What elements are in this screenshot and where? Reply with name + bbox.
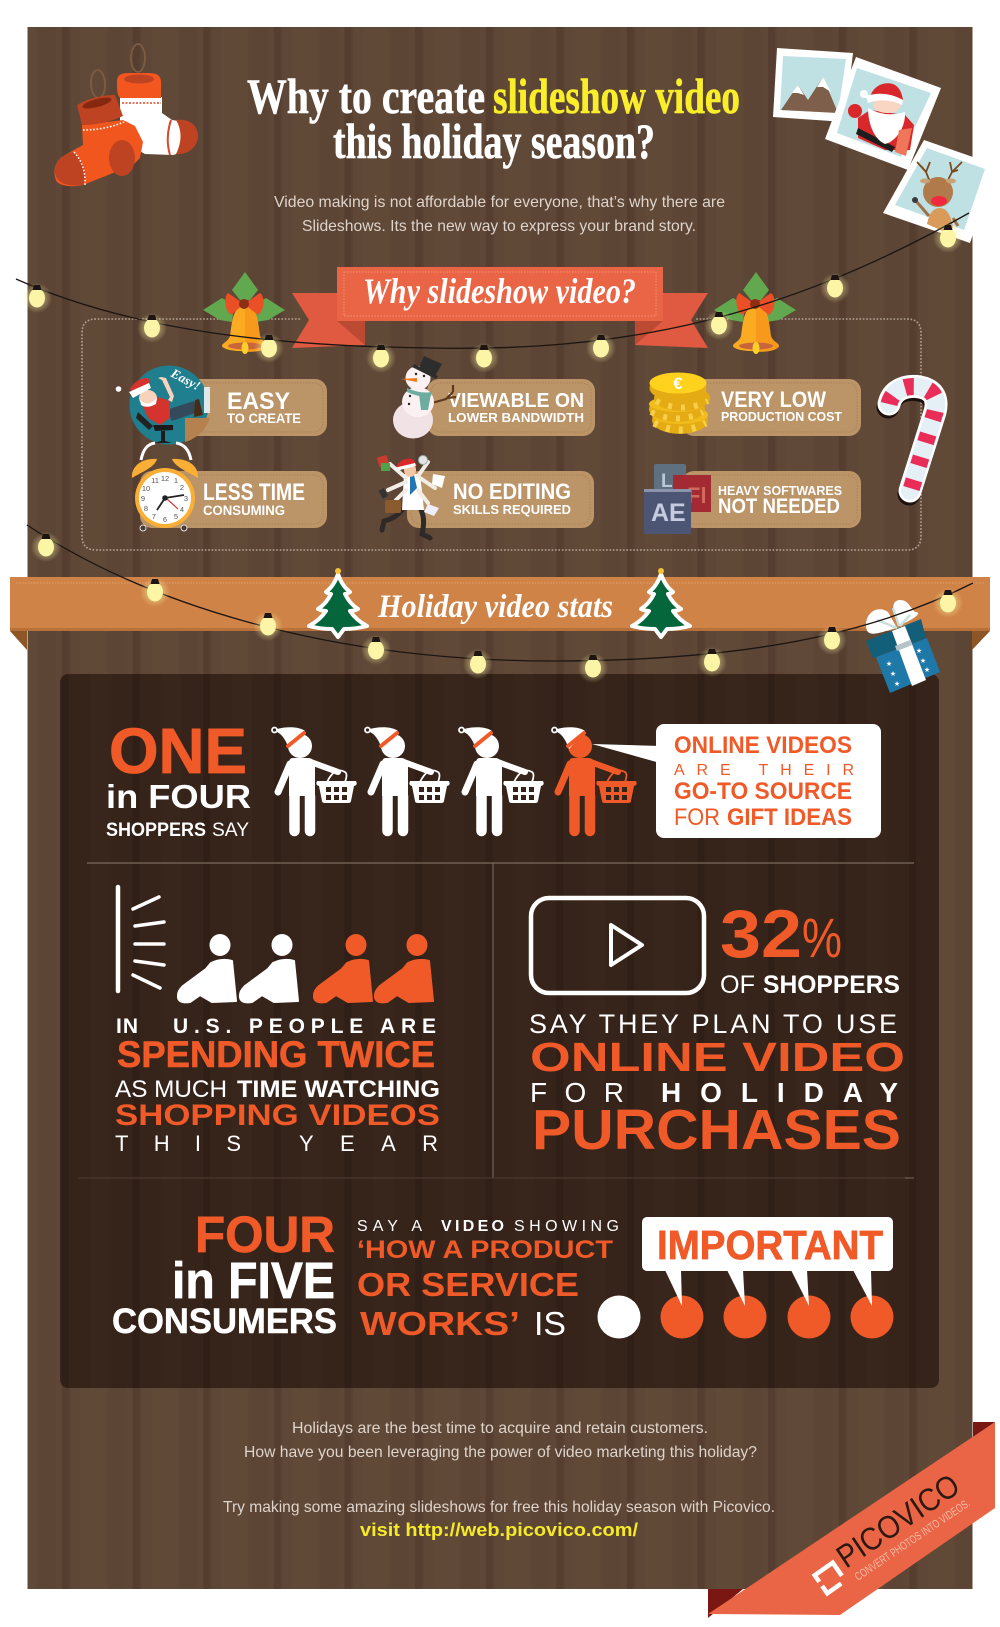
callout: online videos: [592, 724, 881, 838]
icon: snowman: [393, 356, 456, 438]
footer text: Holidays are the best time to acquire and retain customers.: [292, 1420, 708, 1437]
icon: alarm clock: 12: [161, 474, 169, 483]
footer text: How have you been leveraging the power of video marketing this holiday?: [244, 1444, 757, 1461]
pill: viewable on lower bandwidth: VIEWABLE ON: [448, 390, 584, 412]
icon: alarm clock: 9: [141, 494, 145, 503]
icon: gift box: ★: [894, 680, 900, 688]
stat: four in five consumers: in FIVE: [172, 1252, 335, 1309]
pictogram: important speech bubble and dots: IMPORTANT: [657, 1222, 883, 1268]
stat: one in four shoppers: in FOUR: [106, 778, 251, 815]
dotted benefits frame: [82, 319, 921, 550]
pill: easy to create: [185, 379, 327, 436]
icon: alarm clock: 8: [144, 504, 148, 513]
pill: less time consuming: LESS TIME: [203, 479, 305, 506]
stat: one in four shoppers: SHOPPERS: [106, 820, 206, 841]
callout: online videos: ARE THEIR: [674, 762, 854, 779]
icon: candy cane: [888, 386, 936, 494]
icon: christmas socks: [54, 44, 198, 186]
callout: online videos: FOR: [674, 804, 720, 831]
text: people spending twice: YEAR: [299, 1131, 438, 1156]
text: how a product or service works: WORKS’: [360, 1305, 520, 1342]
stat: four in five consumers: CONSUMERS: [112, 1302, 337, 1341]
pill: very low production cost: [682, 379, 861, 436]
stat: 32 percent of shoppers: FOR: [530, 1077, 624, 1108]
pill: heavy softwares not needed: NOT NEEDED: [718, 495, 840, 518]
icon: software boxes: L: [661, 471, 673, 492]
text: people spending twice: [115, 1015, 440, 1156]
callout: online videos: GO-TO SOURCE: [674, 778, 852, 805]
icon: gift box: ★: [890, 670, 896, 678]
icon: alarm clock: 1: [174, 476, 178, 485]
pictogram: four shoppers: [272, 727, 637, 831]
pill: viewable on lower bandwidth: [427, 379, 595, 436]
footer text: [223, 1420, 775, 1540]
pill: less time consuming: CONSUMING: [203, 502, 285, 518]
stat: 32 percent of shoppers: SHOPPERS: [763, 971, 900, 999]
string lights bottom: [27, 525, 973, 683]
string lights top: [16, 213, 969, 373]
icon: alarm clock: 3: [184, 494, 188, 503]
icon: tree right: [632, 568, 690, 637]
pill: very low production cost: PRODUCTION COST: [721, 409, 842, 424]
subtitle text: Slideshows. Its the new way to express your brand story.: [302, 218, 696, 235]
icon: photo with reindeer: [883, 140, 996, 243]
icon: tree left: [309, 568, 367, 637]
pill: no editing skills required: [407, 471, 594, 528]
icon: alarm clock: 2: [180, 483, 184, 492]
pill: no editing skills required: SKILLS REQUIRED: [453, 502, 571, 517]
icon: gift box: ★: [920, 657, 926, 665]
icon: stack of coins: [649, 372, 710, 434]
icon: software boxes: [644, 464, 711, 534]
title: slideshow video: [493, 68, 740, 124]
icon: santa at desk: Easy!: [168, 365, 203, 393]
pictogram: people watching screen: [118, 887, 433, 1002]
text: how a product or service works: SHOWING: [514, 1218, 619, 1235]
text: how a product or service works: VIDEO: [441, 1218, 504, 1235]
stat: one in four shoppers: [106, 715, 251, 841]
icon: bell right: [714, 272, 796, 354]
stat: 32 percent of shoppers: ONLINE VIDEO: [530, 1034, 905, 1080]
text: people spending twice: U.S. PEOPLE ARE: [173, 1015, 436, 1038]
icon: gift box: ★: [916, 647, 922, 655]
stat: four in five consumers: [112, 1206, 337, 1341]
stat: four in five consumers: FOUR: [195, 1206, 335, 1263]
pill: easy to create: TO CREATE: [227, 410, 301, 426]
icon: software boxes: Fl: [687, 483, 707, 508]
picovico wordmark: PICOVICO: [830, 1467, 966, 1575]
icon: video play button: [531, 898, 704, 993]
pictogram: important speech bubble and dots: [598, 1217, 894, 1338]
icon: multitasking man: [377, 455, 445, 538]
text: how a product or service works: ‘HOW A PRODUCT: [357, 1236, 613, 1264]
stat: one in four shoppers: ONE: [109, 715, 247, 787]
footer text: visit http://web.picovico.com/: [360, 1520, 638, 1540]
pill: viewable on lower bandwidth: LOWER BANDWIDTH: [448, 410, 584, 425]
pill: easy to create: EASY: [227, 388, 290, 415]
stat: 32 percent of shoppers: SAY THEY PLAN TO USE: [529, 1009, 897, 1039]
subtitle text: Video making is not affordable for everyone, that’s why there are: [274, 194, 725, 211]
icon: alarm clock: [132, 443, 198, 531]
callout: online videos: GIFT IDEAS: [727, 804, 852, 831]
text: how a product or service works: IS: [534, 1305, 566, 1342]
icon: stack of coins: €: [673, 374, 683, 393]
corner ribbon: picovico: [708, 1422, 995, 1618]
pill: heavy softwares not needed: [682, 471, 861, 528]
title: this holiday season?: [333, 113, 655, 169]
stat: 32 percent of shoppers: OF: [720, 971, 755, 999]
ribbon: why slideshow video: [292, 267, 708, 348]
icon: alarm clock: 5: [174, 512, 178, 521]
dark stats panel: [60, 674, 939, 1388]
pill: heavy softwares not needed: HEAVY SOFTWARES: [718, 483, 842, 498]
pill: no editing skills required: NO EDITING: [453, 479, 571, 504]
text: people spending twice: TIME WATCHING: [237, 1076, 440, 1103]
pill: very low production cost: VERY LOW: [721, 387, 826, 412]
icon: alarm clock: 4: [180, 505, 184, 514]
callout: online videos: ONLINE VIDEOS: [674, 732, 852, 759]
stat: 32 percent of shoppers: PURCHASES: [532, 1098, 901, 1162]
title: [247, 68, 740, 169]
ribbon heading: Why slideshow video?: [363, 271, 636, 311]
icon: alarm clock: 11: [151, 476, 159, 485]
stat: one in four shoppers: SAY: [212, 820, 249, 841]
icon: picovico logo: [815, 1563, 845, 1593]
text: people spending twice: SHOPPING VIDEOS: [115, 1099, 440, 1132]
text: people spending twice: THIS: [115, 1131, 241, 1156]
text: how a product or service works: [357, 1218, 619, 1342]
icon: gift box: ★: [886, 660, 892, 668]
pill: less time consuming: [140, 471, 327, 528]
icon: alarm clock: 7: [152, 512, 156, 521]
text: people spending twice: SPENDING TWICE: [117, 1034, 435, 1075]
text: how a product or service works: OR SERVICE: [357, 1266, 579, 1303]
icon: bell left: [203, 272, 285, 354]
icon: gift box: ★: [924, 666, 930, 674]
stat: 32 percent of shoppers: 32: [720, 896, 802, 972]
icon: alarm clock: 10: [142, 484, 150, 493]
subtitle text: [274, 194, 725, 235]
stat: 32 percent of shoppers: [529, 896, 905, 1162]
title: Why to create: [247, 68, 485, 124]
icon: santa at desk: [116, 365, 210, 444]
icon: gift box: [866, 600, 940, 693]
stat: 32 percent of shoppers: %: [802, 906, 842, 969]
icon: software boxes: AE: [651, 499, 686, 527]
stat: 32 percent of shoppers: HOLIDAY: [661, 1077, 898, 1108]
section band: holiday video stats: [10, 577, 990, 650]
icon: photo with mountains: [773, 48, 853, 122]
icon: alarm clock: 6: [163, 515, 167, 524]
text: how a product or service works: SAY A: [357, 1218, 422, 1235]
icon: photo with santa: [825, 57, 941, 170]
text: people spending twice: IN: [116, 1015, 138, 1038]
text: people spending twice: AS MUCH: [115, 1076, 227, 1103]
footer text: Try making some amazing slideshows for free this holiday season with Picovico.: [223, 1499, 775, 1516]
section heading: Holiday video stats: [377, 589, 613, 625]
